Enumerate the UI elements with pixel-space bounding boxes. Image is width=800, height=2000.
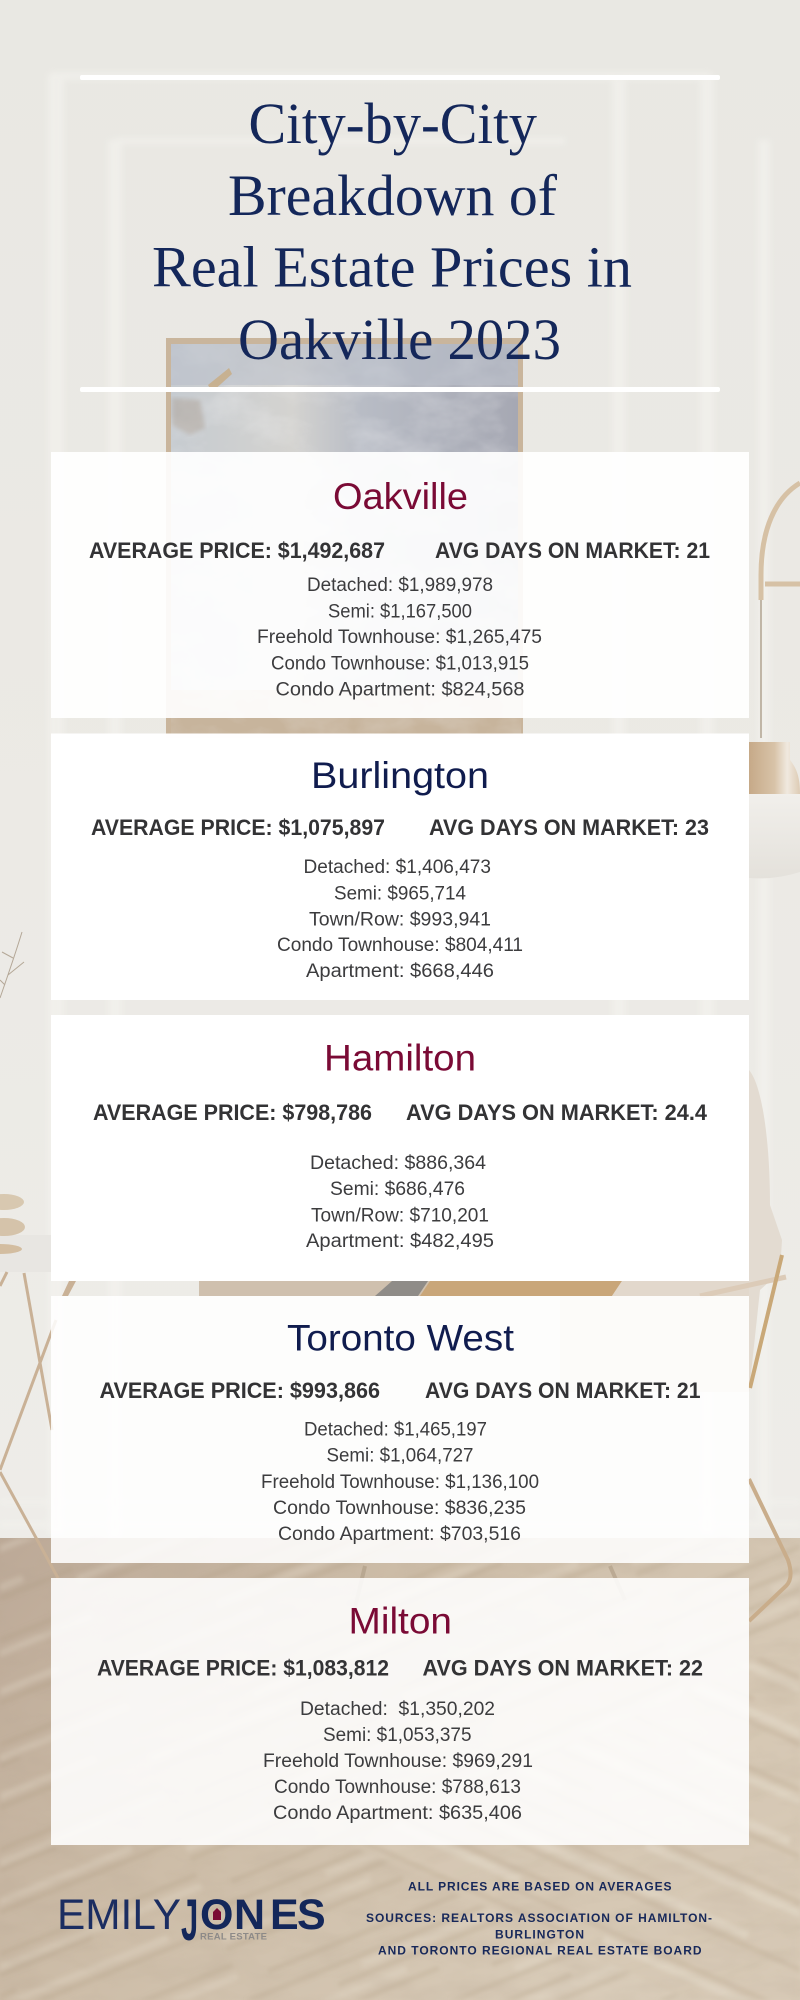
price list: Condo Townhouse: $788,613 [274,1777,521,1798]
icon: house in the O [213,1908,221,1920]
footer note: sources: AND TORONTO REGIONAL REAL ESTATE BOARD [378,1944,702,1958]
price list: Condo Townhouse: $836,235 [273,1498,526,1519]
stat: average price: AVERAGE PRICE: $1,492,687 [89,538,385,563]
stat: average price: AVERAGE PRICE: $1,075,897 [91,815,385,840]
price list: Condo Townhouse: $804,411 [277,935,523,956]
stat: days on market: AVG DAYS ON MARKET: 22 [422,1656,703,1680]
price list [257,575,542,700]
footer note: sources: ALL PRICES ARE BASED ON AVERAGES [408,1880,672,1894]
price list: Semi: $1,053,375 [323,1725,472,1746]
price list: Semi: $965,714 [334,884,466,904]
panel: Hamilton [51,1015,749,1281]
panel: Oakville [51,452,749,718]
branch [0,932,24,998]
panel: Milton [51,1578,749,1845]
stat: days on market: AVG DAYS ON MARKET: 21 [435,538,710,563]
stat: days on market: AVG DAYS ON MARKET: 21 [425,1378,700,1403]
price list: Detached: $1,465,197 [304,1420,487,1440]
stat: average price: AVERAGE PRICE: $798,786 [93,1100,372,1125]
price list: Town/Row: $993,941 [309,910,491,930]
logo: Emily Jones Real Estate: EMILY [57,1891,181,1939]
heading: Milton: Milton [348,1600,452,1642]
panel: Burlington [51,734,749,1000]
price list [306,1153,494,1252]
footer note: sources: BURLINGTON [495,1928,584,1942]
price list: Freehold Townhouse: $969,291 [263,1751,533,1772]
lamp [761,483,800,600]
footer note: sources [366,1880,712,1958]
title: Real Estate Prices in [152,234,632,300]
painting [166,338,523,738]
logo: Emily Jones Real Estate [57,1887,326,1952]
price list [277,857,523,982]
price list: Detached: $1,989,978 [307,575,493,596]
heading: Oakville: Oakville [333,476,468,517]
stat: days on market: AVG DAYS ON MARKET: 23 [429,815,709,840]
panel: Toronto West [51,1296,749,1563]
header rule bottom [80,387,720,392]
price list: Freehold Townhouse: $1,136,100 [261,1472,539,1493]
title: City-by-City [248,91,537,156]
price list: Semi: $1,167,500 [328,602,472,622]
price list: Freehold Townhouse: $1,265,475 [257,627,542,648]
price list: Detached: $1,406,473 [304,857,491,878]
price list: Detached: $886,364 [310,1153,486,1174]
chair [62,1070,791,1621]
logo: Emily Jones Real Estate: J [181,1887,198,1952]
title: Oakville 2023 [238,307,561,372]
floor [0,1538,800,2000]
logo: Emily Jones Real Estate: ONES [200,1891,326,1939]
price list [263,1699,533,1824]
stat: average price: AVERAGE PRICE: $993,866 [100,1378,380,1403]
title: Breakdown of [228,163,558,228]
price list [261,1420,539,1545]
price list: Town/Row: $710,201 [311,1206,489,1226]
stat: average price: AVERAGE PRICE: $1,083,812 [97,1656,389,1680]
heading: Burlington: Burlington [311,755,489,796]
price list: Detached: $1,350,202 [300,1699,495,1720]
heading: Toronto West: Toronto West [287,1318,515,1358]
price list: Apartment: $668,446 [306,961,494,982]
stones and side table [0,1194,58,1578]
price list: Condo Townhouse: $1,013,915 [271,654,529,674]
header rule top [80,75,720,80]
price list: Condo Apartment: $703,516 [278,1524,521,1545]
logo: Emily Jones Real Estate: REAL ESTATE [200,1932,267,1942]
stat: days on market: AVG DAYS ON MARKET: 24.4 [406,1100,708,1125]
price list: Semi: $686,476 [330,1179,465,1200]
footer note: sources: SOURCES: REALTORS ASSOCIATION OF HAMILTON- [366,1911,712,1925]
price list: Apartment: $482,495 [306,1231,494,1252]
heading: Hamilton: Hamilton [324,1038,476,1078]
price list: Condo Apartment: $635,406 [273,1803,522,1824]
price list: Semi: $1,064,727 [326,1446,474,1466]
title [152,91,632,372]
price list: Condo Apartment: $824,568 [276,680,524,700]
